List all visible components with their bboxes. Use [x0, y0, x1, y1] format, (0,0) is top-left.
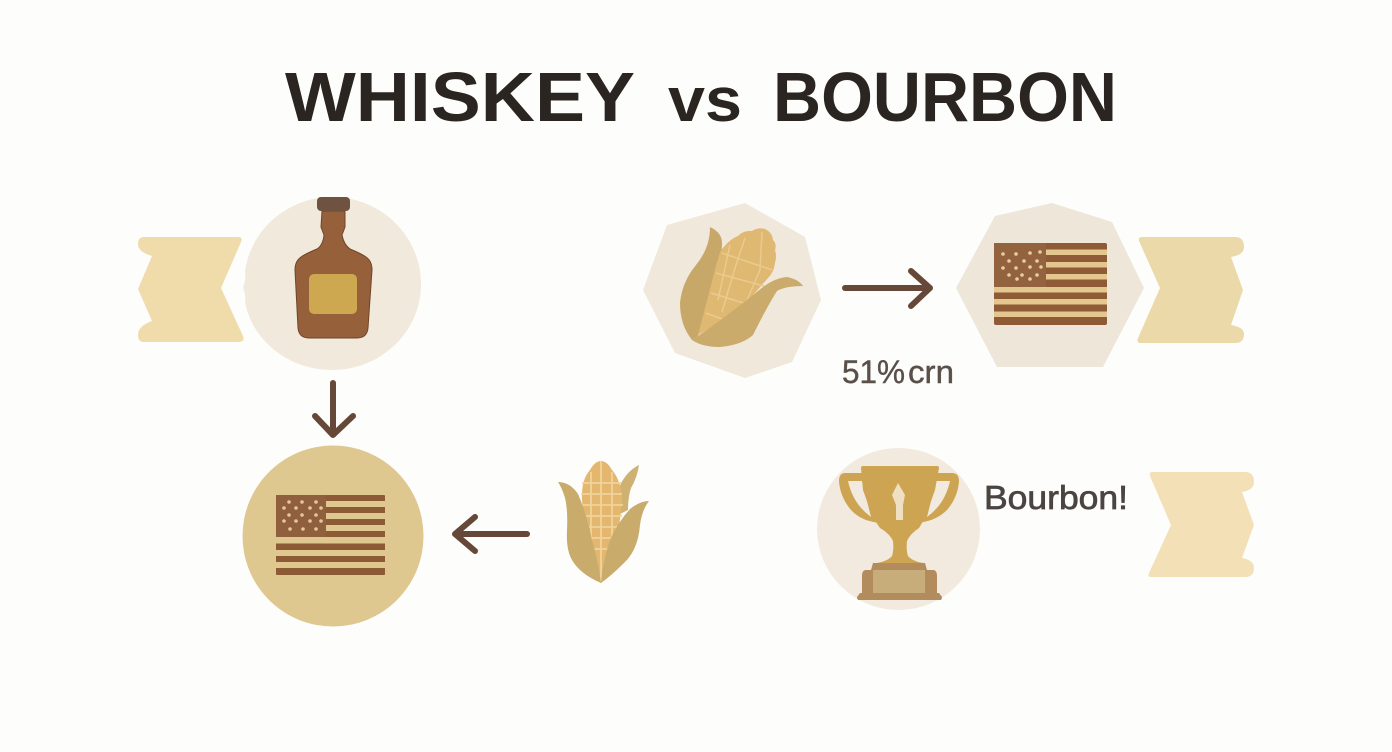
ribbon: top right [1137, 237, 1244, 343]
handle cutouts [848, 481, 950, 517]
arrow: corn to flag circle [455, 517, 527, 551]
icon: corn [558, 461, 649, 583]
title: vs [668, 66, 742, 135]
label: 51% corn: 51% [842, 354, 905, 390]
flag stripes [276, 501, 385, 568]
label: 51% corn [842, 354, 954, 390]
label: Bourbon!: Bourbon! [984, 479, 1128, 516]
icon: flag in circle [242, 446, 424, 626]
bottle cap [317, 197, 350, 211]
right husk [601, 501, 649, 583]
cob kernel lines [706, 232, 772, 322]
icon: flag in heptagon [956, 203, 1144, 367]
trophy cup [861, 466, 939, 563]
flag [994, 243, 1107, 325]
flag stripes [994, 250, 1107, 317]
title [285, 58, 1117, 136]
bottle label [309, 274, 357, 314]
base plaque [873, 570, 925, 593]
cup emblem [892, 483, 905, 520]
back right husk [618, 465, 639, 515]
flag canton [994, 243, 1046, 287]
flag [276, 495, 385, 575]
icon: whiskey bottle in circle [243, 197, 421, 370]
ribbon: top left [138, 237, 244, 342]
trophy handles [839, 473, 959, 523]
label: 51% corn: crn [908, 354, 954, 390]
cob kernel lines [581, 461, 623, 583]
ribbon: bottom right [1148, 472, 1254, 577]
title: BOURBON [773, 58, 1117, 136]
bottle body [295, 211, 372, 338]
title: WHISKEY [285, 58, 635, 136]
trophy base [857, 563, 942, 600]
flag canton [276, 495, 326, 537]
icon: trophy in circle [817, 448, 980, 610]
flag stars [1001, 250, 1043, 281]
left husk [680, 227, 722, 340]
arrow: corn to flag [845, 271, 930, 306]
right husk [692, 277, 803, 347]
arrow: bottle down to flag [315, 383, 353, 435]
left husk [558, 482, 601, 583]
corn cob [582, 461, 622, 583]
icon: corn in octagon [643, 203, 821, 378]
corn cob [698, 228, 776, 335]
flag stars [282, 500, 323, 531]
